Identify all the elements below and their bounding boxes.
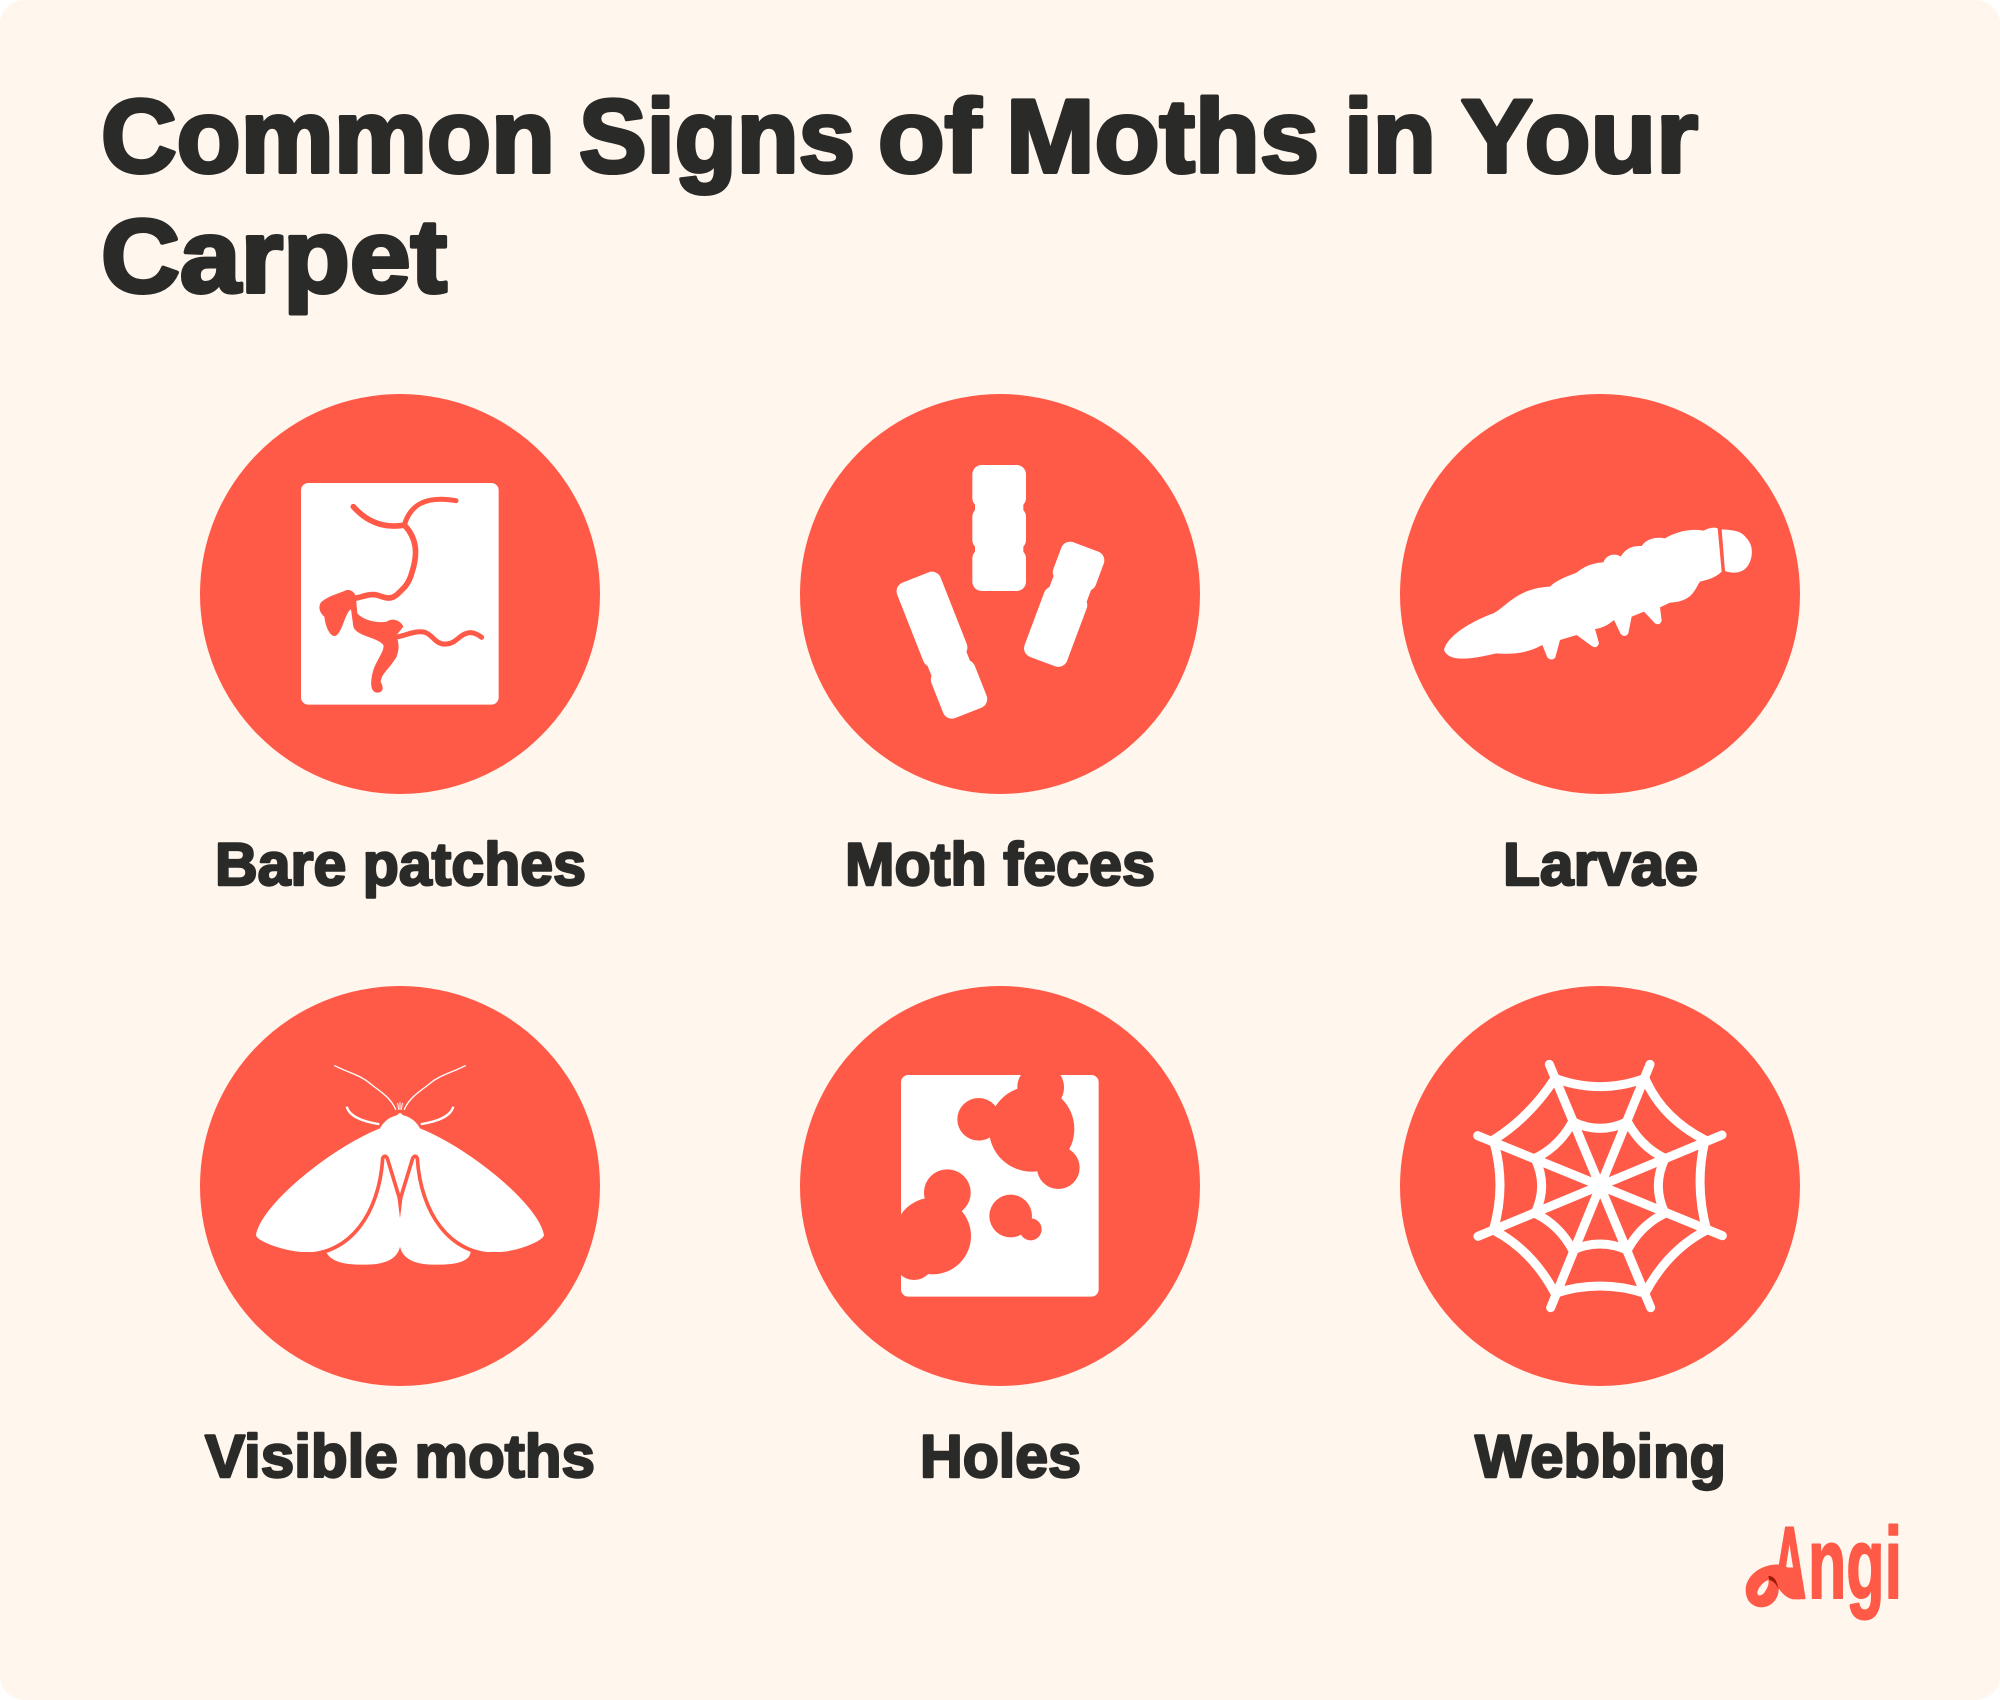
label: bare patches: Bare patches	[215, 831, 586, 898]
label: moth feces: Moth feces	[845, 831, 1155, 898]
title	[101, 79, 1698, 315]
logo: Angi	[1746, 1508, 1902, 1620]
panel: bare patches	[200, 394, 600, 898]
icon: carpet with bare patches	[301, 483, 499, 705]
label: webbing: Webbing	[1475, 1423, 1726, 1490]
icon: moth feces pellets	[894, 465, 1107, 721]
label: holes: Holes	[920, 1423, 1081, 1490]
panel: moth feces	[800, 394, 1200, 898]
circle: moth feces	[800, 394, 1200, 794]
panel: larvae	[1400, 394, 1800, 898]
label: larvae: Larvae	[1503, 831, 1698, 898]
panel: webbing	[1400, 986, 1800, 1490]
icon: carpet with holes	[894, 1064, 1099, 1297]
circle: visible moths	[200, 986, 600, 1386]
icon: spider web	[1478, 1064, 1722, 1308]
title: Carpet	[101, 199, 447, 315]
icon: larva	[1444, 528, 1752, 659]
title: Your	[1461, 79, 1698, 195]
circle: bare patches	[200, 394, 600, 794]
title: of	[878, 79, 981, 195]
title: in	[1344, 79, 1436, 195]
circle: holes	[800, 986, 1200, 1386]
icon: moth	[256, 1066, 544, 1265]
logo: Angi: ngi	[1808, 1508, 1902, 1620]
logo: Angi: A	[1773, 1508, 1806, 1620]
panel: visible moths	[200, 986, 600, 1490]
circle: larvae	[1400, 394, 1800, 794]
title: Moths	[1006, 79, 1319, 195]
title: Common	[101, 79, 555, 195]
circle: webbing	[1400, 986, 1800, 1386]
title: Signs	[579, 79, 855, 195]
panel: holes	[800, 986, 1200, 1490]
label: visible moths: Visible moths	[205, 1423, 595, 1490]
